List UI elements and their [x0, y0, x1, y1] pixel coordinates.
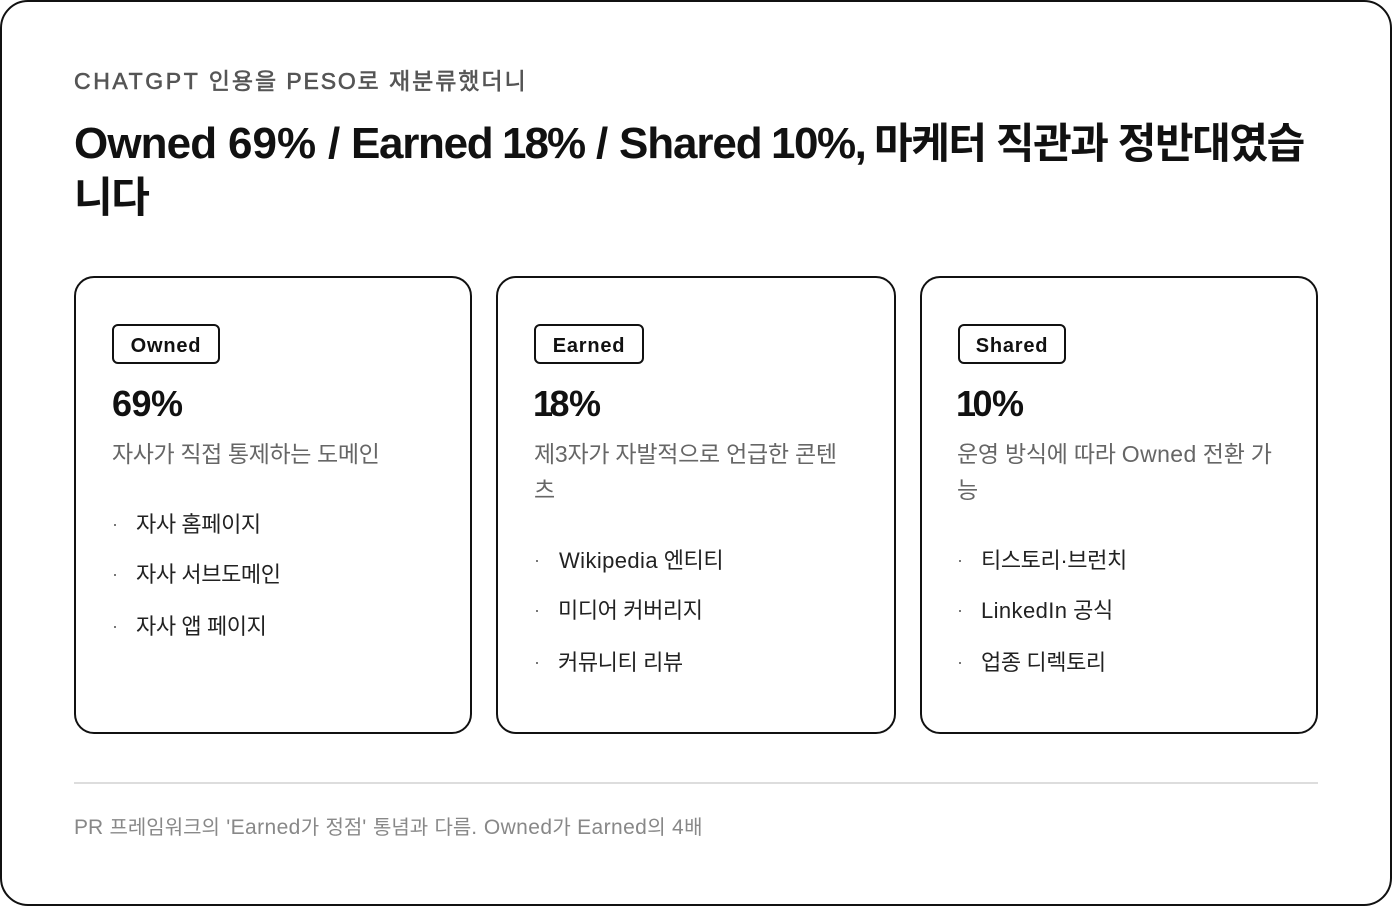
earned list: 커뮤니티 리뷰 [558, 650, 683, 675]
owned description: 자사가 직접 통제하는 도메인 [112, 441, 379, 467]
title: Owned [74, 119, 216, 168]
earned description: 제3자가 자발적으로 언급한 콘텐 [534, 441, 837, 467]
shared description: 운영 방식에 따라 Owned 전환 가 [957, 441, 1272, 467]
owned list: 자사 앱 페이지 [136, 614, 266, 639]
title: 18% [502, 119, 584, 168]
earned list: 미디어 커버리지 [558, 598, 703, 623]
earned list: Wikipedia 엔티티 [559, 548, 723, 573]
title: 니다 [74, 174, 148, 221]
earned tag: Earned [553, 335, 625, 357]
panel: earned [496, 276, 896, 734]
owned list [114, 512, 281, 639]
shared description: 능 [957, 477, 978, 503]
shared list: 업종 디렉토리 [981, 650, 1106, 675]
shared list: LinkedIn 공식 [981, 598, 1113, 623]
earned description: 츠 [534, 477, 555, 503]
shared description [957, 441, 1272, 503]
owned tag [112, 324, 220, 364]
owned percent: 69% [112, 383, 183, 424]
title: Shared [619, 119, 762, 168]
title: 마케터 직관과 정반대였습 [874, 120, 1304, 167]
earned tag [534, 324, 644, 364]
earned percent: 18% [533, 383, 601, 424]
earned list [536, 548, 723, 675]
title: Earned [351, 119, 492, 168]
earned description [534, 441, 837, 503]
title: / [328, 119, 340, 168]
owned list: 자사 홈페이지 [136, 512, 261, 537]
eyebrow: CHATGPT 인용을 PESO로 재분류했더니 [74, 68, 528, 94]
shared list: 티스토리·브런치 [981, 548, 1127, 573]
title: 69% [228, 119, 316, 168]
title [74, 119, 1304, 221]
shared tag: Shared [976, 335, 1048, 357]
owned list: 자사 서브도메인 [136, 562, 281, 587]
panel: owned [74, 276, 472, 734]
title: 10%, [771, 119, 865, 168]
footnote: PR 프레임워크의 'Earned가 정점' 통념과 다름. Owned가 Earned의 4배 [74, 816, 702, 839]
owned tag: Owned [131, 335, 201, 357]
shared percent: 10% [956, 383, 1024, 424]
panel: shared [920, 276, 1318, 734]
shared tag [958, 324, 1066, 364]
shared list [959, 548, 1127, 675]
title: / [596, 119, 608, 168]
